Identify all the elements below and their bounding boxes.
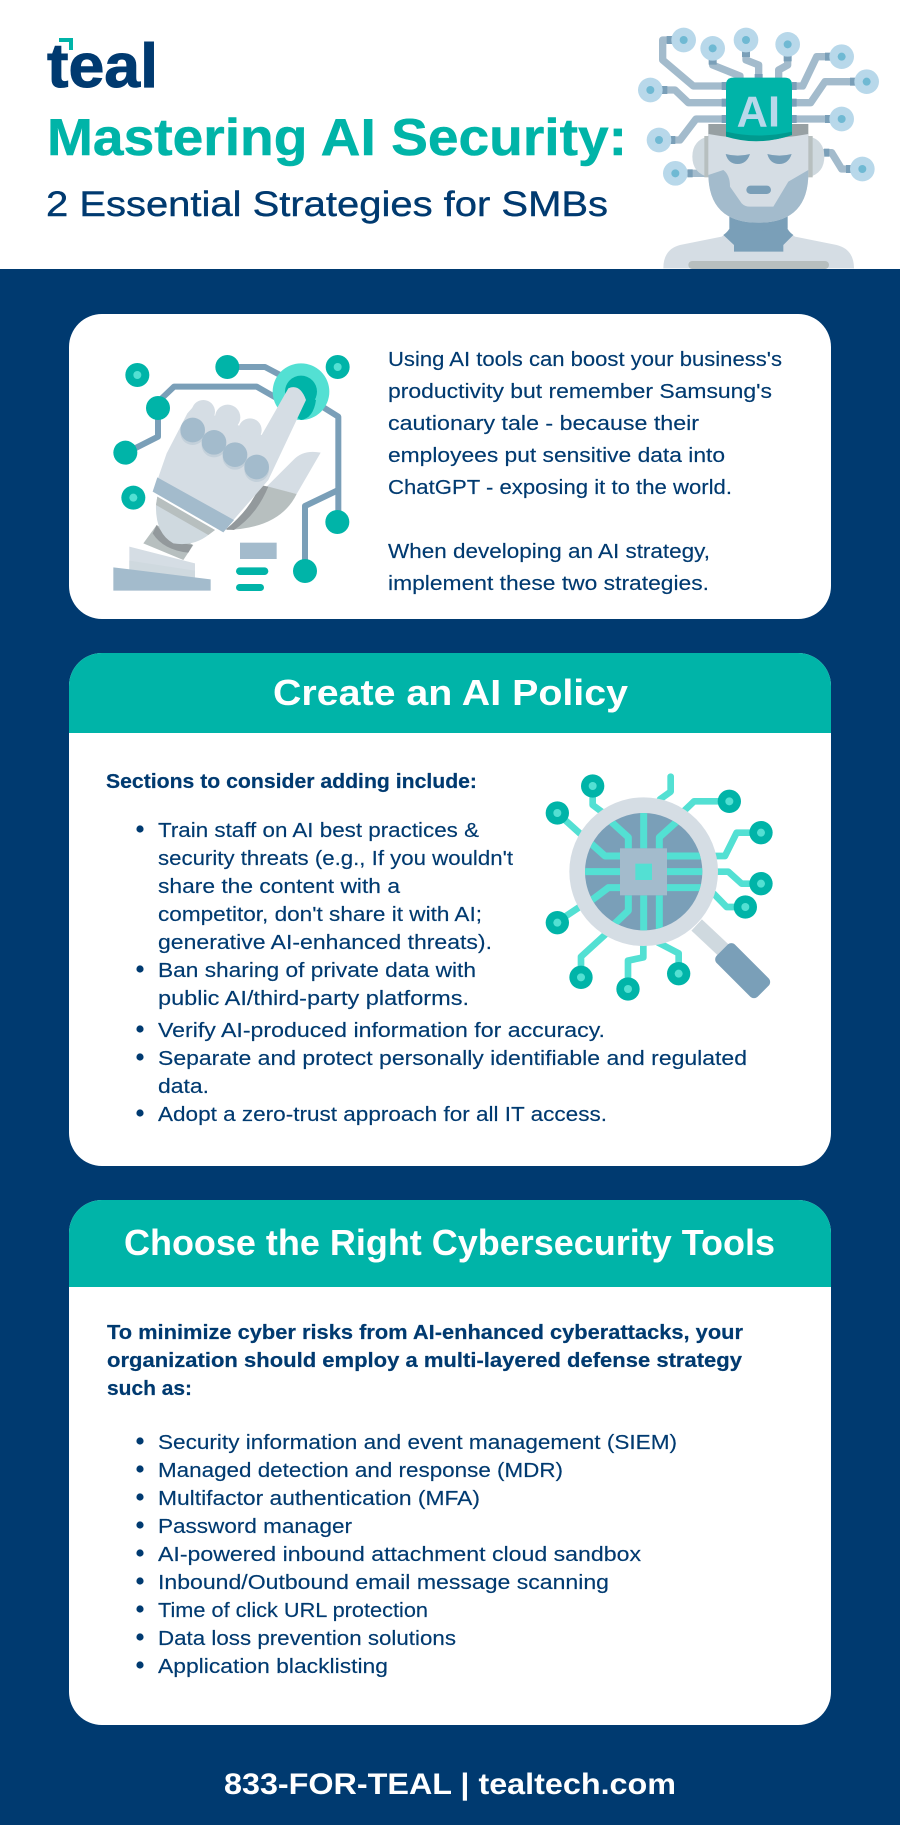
bullet list: tools: Password manager [158, 1516, 352, 1538]
intro text: When developing an AI strategy, [388, 541, 710, 563]
bullet list: tools: Data loss prevention solutions [158, 1628, 456, 1650]
bullet list: policy sections: Verify AI-produced information for accuracy. [158, 1020, 605, 1042]
bullet list: policy sections: competitor, don't share it with AI; [158, 904, 482, 926]
bullet list: policy sections: Adopt a zero-trust approach for all IT access. [158, 1104, 607, 1126]
intro text [388, 349, 782, 595]
bullet list: policy sections: security threats (e.g., If you wouldn't [158, 848, 513, 870]
bullet list: tools: Inbound/Outbound email message scanning [158, 1572, 609, 1594]
logo: teal: teal [47, 32, 158, 101]
bullet list: policy sections: Train staff on AI best practices & [158, 820, 480, 842]
bullet list: policy sections: data. [158, 1076, 209, 1098]
icon: AI robot head with circuits [638, 28, 879, 269]
bullet list: tools: AI-powered inbound attachment cloud sandbox [158, 1544, 641, 1566]
intro text: Using AI tools can boost your business's [388, 349, 782, 371]
footer contact line: 833-FOR-TEAL | tealtech.com [224, 1768, 676, 1801]
bullet list: policy sections: Separate and protect personally identifiable and regulated [158, 1048, 747, 1070]
icon: AI robot head with circuits: AI [737, 89, 780, 137]
panel: create an AI policy [69, 653, 831, 1166]
intro text: productivity but remember Samsung's [388, 381, 772, 403]
heading: cybersecurity tools: Choose the Right Cybersecurity Tools [124, 1222, 775, 1263]
intro text: cautionary tale - because their [388, 413, 699, 435]
bullet list: tools: Time of click URL protection [158, 1600, 428, 1622]
bullet list: policy sections: generative AI-enhanced threats). [158, 932, 492, 954]
header band [0, 0, 900, 269]
bullet list: policy sections: Ban sharing of private data with [158, 960, 476, 982]
bullet list: tools: Managed detection and response (MDR) [158, 1460, 563, 1482]
intro text: implement these two strategies. [388, 573, 709, 595]
icon: robot hand touching circuit [113, 355, 350, 591]
subtitle: 2 Essential Strategies for SMBs [46, 185, 608, 224]
intro text: ChatGPT - exposing it to the world. [388, 477, 732, 499]
intro paragraph: multi-layered defense: organization should employ a multi-layered defense strategy [107, 1350, 743, 1372]
intro text: employees put sensitive data into [388, 445, 725, 467]
panel: intro [69, 314, 831, 619]
intro paragraph: multi-layered defense [107, 1322, 743, 1400]
intro paragraph: multi-layered defense: such as: [107, 1378, 192, 1400]
panel: choose the right cybersecurity tools [69, 1200, 831, 1725]
bullet list: tools: Security information and event management (SIEM) [158, 1432, 677, 1454]
heading: create an AI policy: Create an AI Policy [273, 672, 628, 713]
title: Mastering AI Security: [47, 109, 627, 167]
bullet list: policy sections: public AI/third-party platforms. [158, 988, 469, 1010]
subheading: sections: Sections to consider adding include: [106, 771, 477, 793]
bullet list: policy sections [136, 820, 747, 1126]
bullet list: tools: Multifactor authentication (MFA) [158, 1488, 480, 1510]
bullet list: policy sections: share the content with a [158, 876, 401, 898]
icon: magnifier over circuit chip [546, 774, 773, 1001]
bullet list: tools: Application blacklisting [158, 1656, 388, 1678]
bullet list: tools [136, 1432, 677, 1678]
intro paragraph: multi-layered defense: To minimize cyber risks from AI-enhanced cyberattacks, your [107, 1322, 743, 1344]
